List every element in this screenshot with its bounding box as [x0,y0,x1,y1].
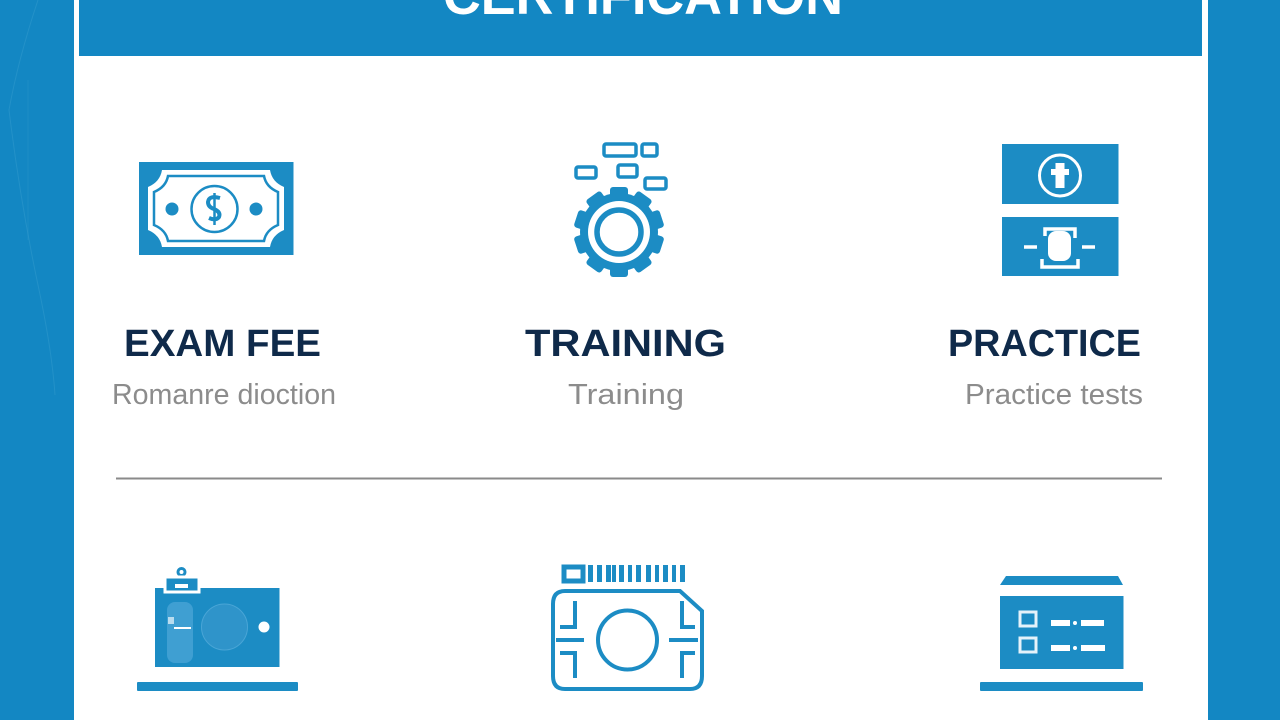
heading: exam fee: EXAM FEE [124,323,321,365]
text: exam fee description: Romanre dioction [112,379,336,411]
heading: practice: PRACTICE [948,323,1141,365]
icon: chip card [553,565,702,689]
divider [116,478,1162,480]
icon: banknote [139,162,294,255]
icon: gear with blocks [573,144,666,277]
title banner [79,0,1202,56]
heading: training: TRAINING [525,323,726,365]
icon: practice panels [1002,144,1118,276]
icon: camera screen [137,568,298,691]
text: practice description: Practice tests [965,379,1143,411]
icon: checklist screen [980,576,1143,691]
text: training description: Training [568,379,684,411]
